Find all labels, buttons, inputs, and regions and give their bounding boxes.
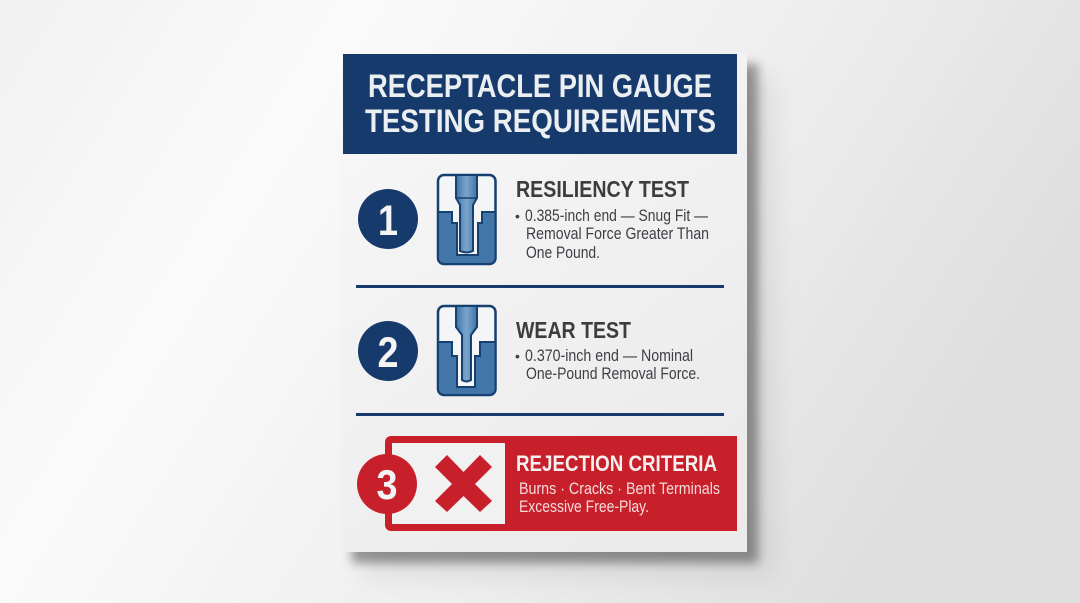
text block: 0.385-inch end — Snug Fit — bbox=[525, 207, 708, 225]
text block: One Pound. bbox=[526, 244, 600, 262]
text block bbox=[515, 207, 709, 262]
heading: RESILIENCY TEST bbox=[516, 176, 689, 202]
title: RECEPTACLE PIN GAUGE bbox=[368, 68, 712, 104]
panel: wear test bbox=[358, 306, 700, 395]
paper sheet bbox=[343, 53, 747, 552]
panel: rejection criteria bbox=[357, 436, 737, 531]
red banner bbox=[385, 436, 737, 531]
number badge 2: 2 bbox=[378, 329, 398, 377]
icon: pin gauge in snug receptacle bbox=[438, 175, 496, 264]
number badge 1 bbox=[358, 189, 418, 249]
title bbox=[365, 68, 716, 139]
title: TESTING REQUIREMENTS bbox=[365, 103, 716, 139]
text block: One-Pound Removal Force. bbox=[526, 365, 700, 383]
icon: pin gauge in worn receptacle bbox=[438, 306, 496, 395]
text block: • bbox=[515, 208, 520, 224]
text block: Burns · Cracks · Bent Terminals bbox=[519, 480, 720, 498]
icon: red cross bbox=[435, 455, 492, 512]
heading: WEAR TEST bbox=[516, 317, 631, 343]
text block: • bbox=[515, 348, 520, 364]
number badge 3 bbox=[357, 454, 417, 514]
header banner bbox=[343, 54, 737, 154]
text block: Excessive Free-Play. bbox=[519, 498, 649, 516]
text block bbox=[519, 480, 720, 516]
number badge 3: 3 bbox=[376, 461, 398, 508]
text block: 0.370-inch end — Nominal bbox=[525, 347, 693, 365]
white icon box bbox=[392, 443, 505, 524]
text block bbox=[515, 347, 700, 383]
paper drop shadow bbox=[352, 64, 772, 575]
number badge 1: 1 bbox=[378, 197, 398, 245]
panel: resiliency test bbox=[358, 175, 709, 264]
number badge 2 bbox=[358, 321, 418, 381]
text block: Removal Force Greater Than bbox=[526, 225, 709, 243]
heading: REJECTION CRITERIA bbox=[516, 451, 717, 476]
